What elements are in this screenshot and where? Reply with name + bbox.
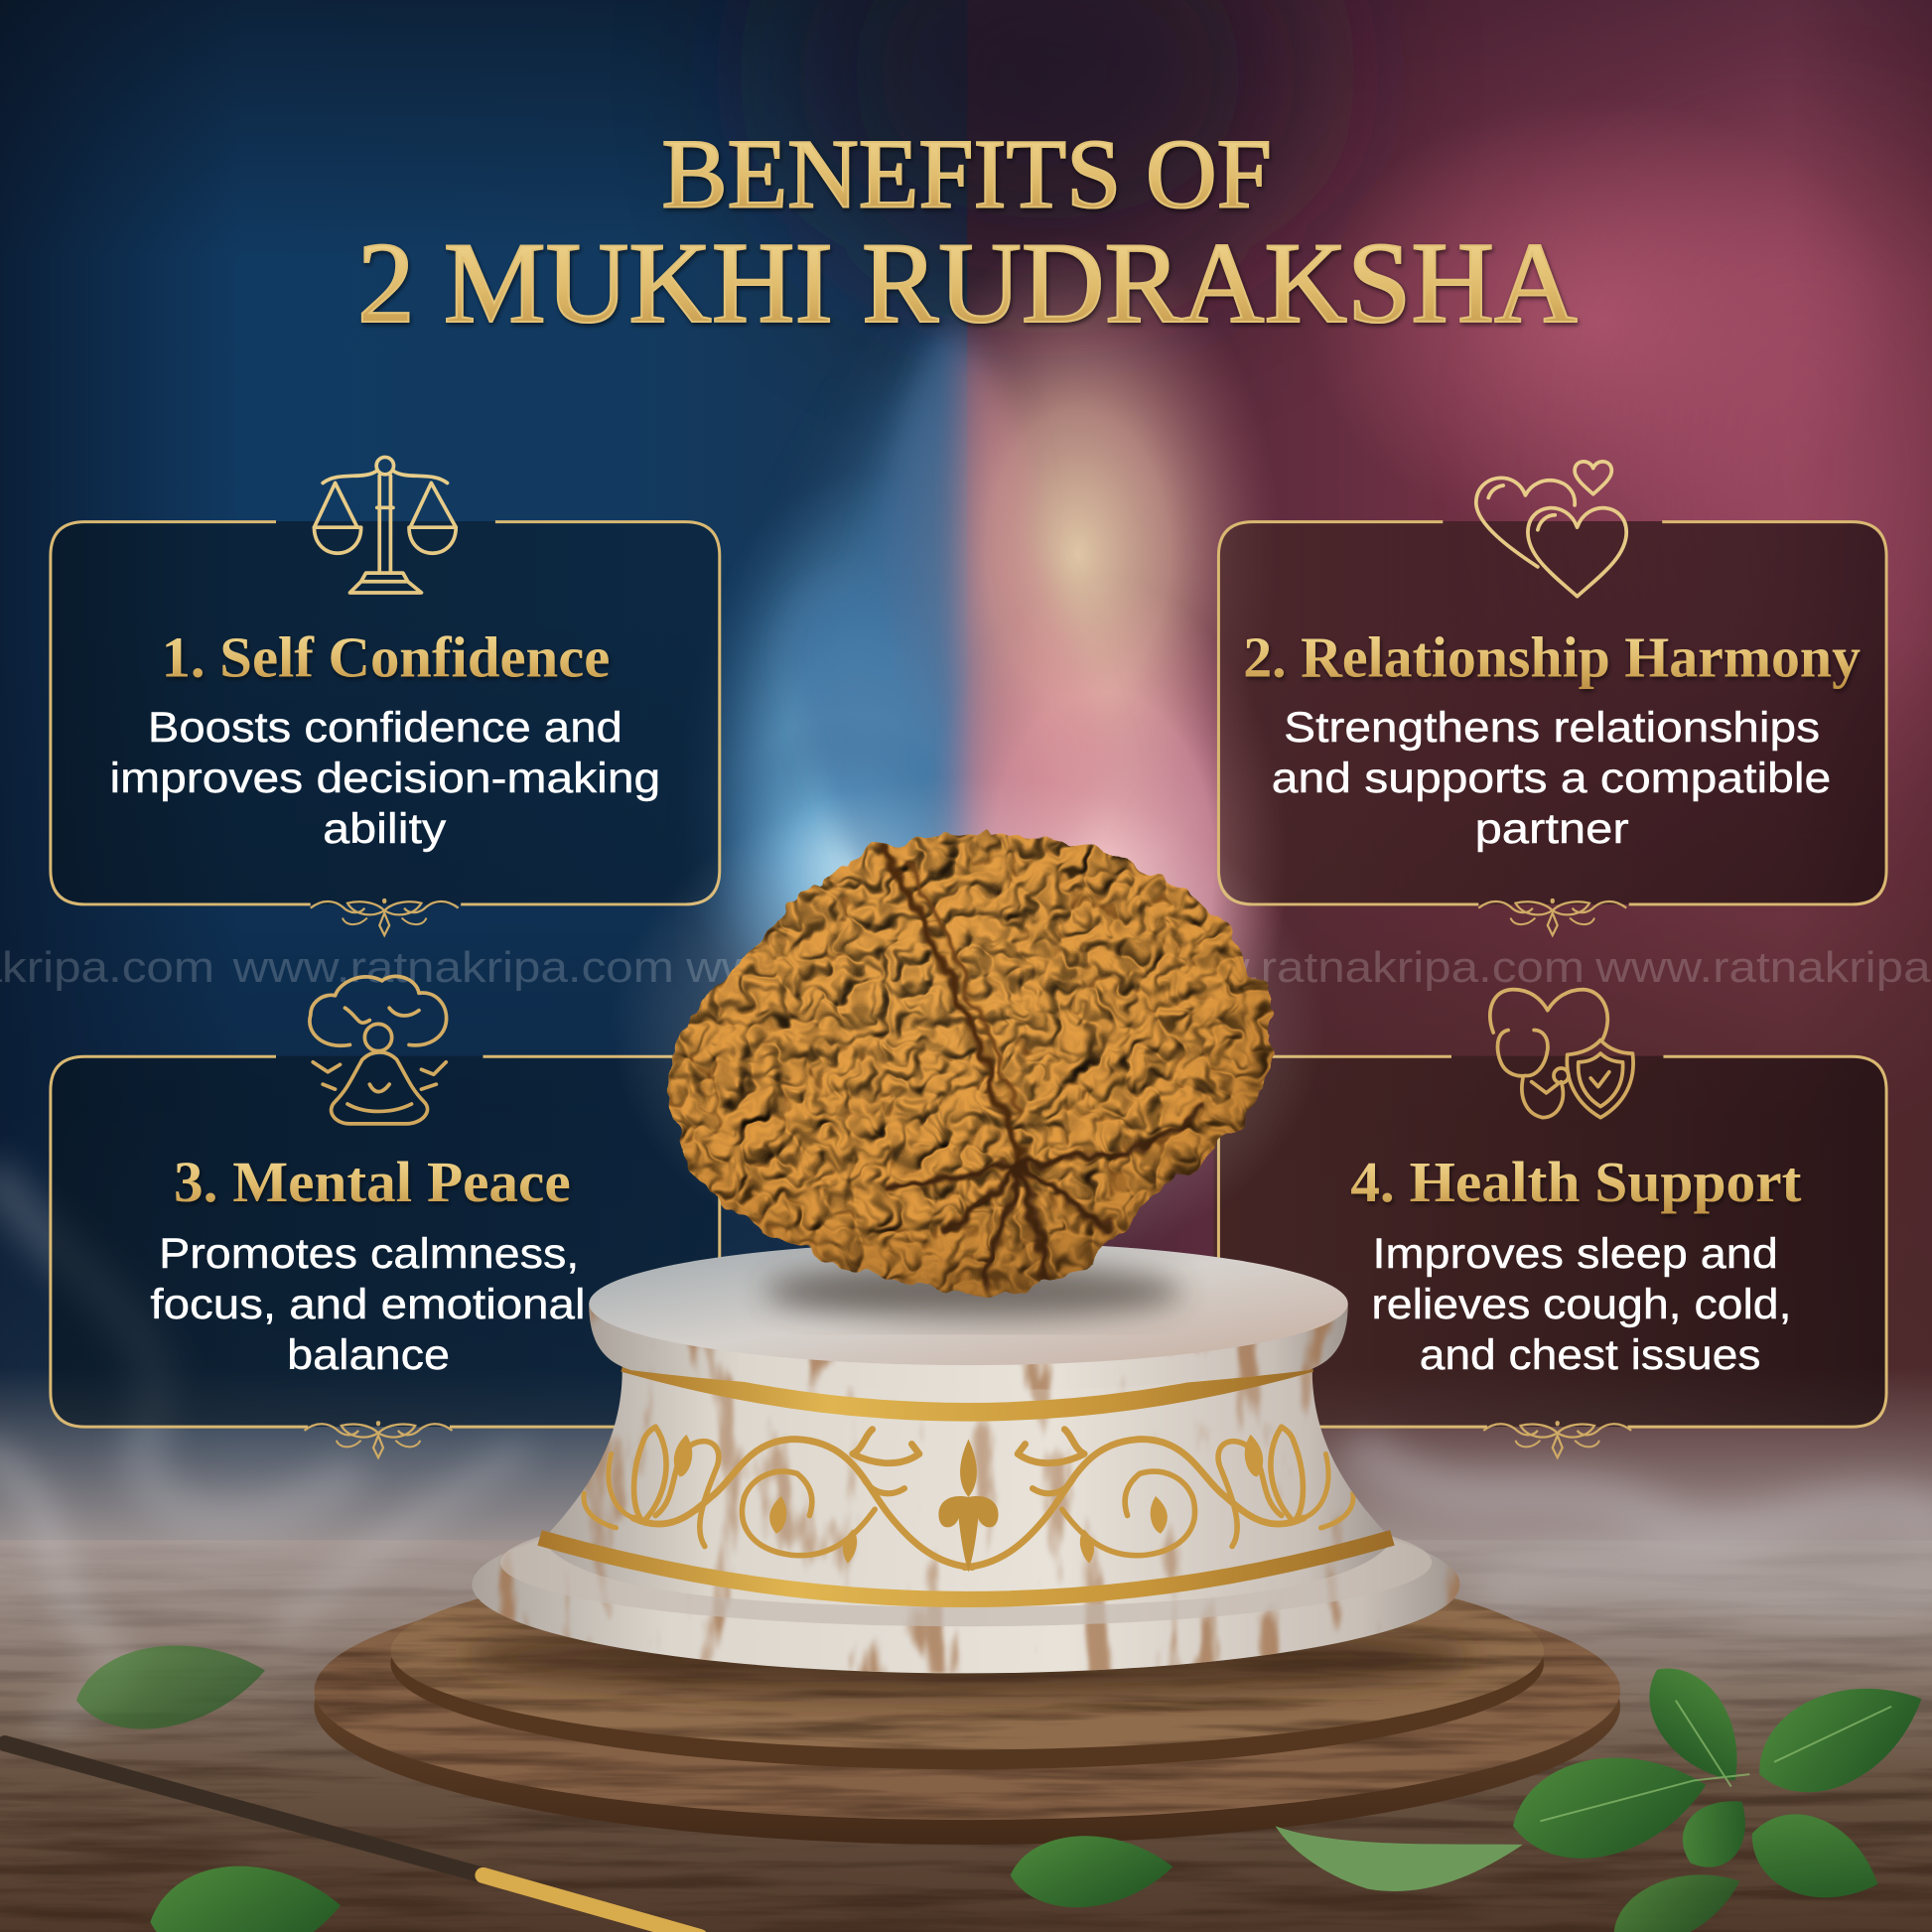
panel: self confidence (51, 457, 720, 935)
description: and chest issues (1420, 1331, 1760, 1378)
description: relieves cough, cold, (1371, 1281, 1792, 1327)
description: ability (323, 805, 447, 852)
heading: 4. Health Support (1350, 1150, 1802, 1214)
table (0, 1368, 1932, 1932)
panel: mental peace (51, 976, 720, 1457)
panel: health support (1218, 990, 1886, 1457)
top disc (589, 1242, 1348, 1391)
wooden plinth (314, 1553, 1620, 1845)
rudraksha bead (666, 829, 1275, 1298)
marble pedestal (472, 1242, 1460, 1673)
heading: 2. Relationship Harmony (1243, 624, 1861, 689)
bead grooves (885, 850, 1201, 1282)
ornament (305, 1422, 452, 1457)
description: improves decision-making (109, 755, 660, 801)
heading: 1. Self Confidence (162, 624, 610, 689)
ornament (1483, 1422, 1631, 1457)
description: partner (1475, 805, 1629, 852)
ornament (1478, 899, 1626, 935)
watermark: www.ratnakripa.com (685, 944, 1128, 992)
watermark: www.ratnakripa.com (231, 944, 674, 992)
description (1272, 704, 1831, 852)
heading: 3. Mental Peace (174, 1150, 571, 1214)
ornament (311, 899, 459, 935)
description (150, 1230, 586, 1378)
icon: health (1490, 990, 1633, 1118)
incense stick (5, 1743, 700, 1932)
icon: meditation (310, 976, 447, 1124)
icon: hearts (1476, 462, 1626, 597)
base disc (472, 1496, 1460, 1673)
title: BENEFITS OF (661, 120, 1272, 228)
title: 2 MUKHI RUDRAKSHA (357, 219, 1578, 347)
description: and supports a compatible (1272, 755, 1831, 801)
watermark (0, 944, 1932, 992)
title (357, 120, 1578, 347)
description: focus, and emotional (150, 1281, 586, 1327)
smoke (0, 1182, 1932, 1725)
description: Promotes calmness, (159, 1230, 579, 1277)
waist with gold scrollwork (542, 1370, 1392, 1606)
gold rings (540, 1538, 1392, 1599)
panel: relationship harmony (1218, 462, 1886, 935)
description (1371, 1230, 1792, 1378)
description: balance (287, 1331, 450, 1378)
watermark: www.ratnakripa.com (1143, 944, 1585, 992)
description (109, 704, 660, 852)
leaves: basil scattered on table (70, 1630, 1932, 1932)
icon: scales (314, 457, 456, 593)
description: Improves sleep and (1373, 1230, 1778, 1277)
description: Boosts confidence and (148, 704, 622, 751)
description: Strengthens relationships (1284, 704, 1820, 751)
halo behind bead (610, 776, 1324, 1282)
background: blurred deity silhouette (786, 333, 1115, 924)
